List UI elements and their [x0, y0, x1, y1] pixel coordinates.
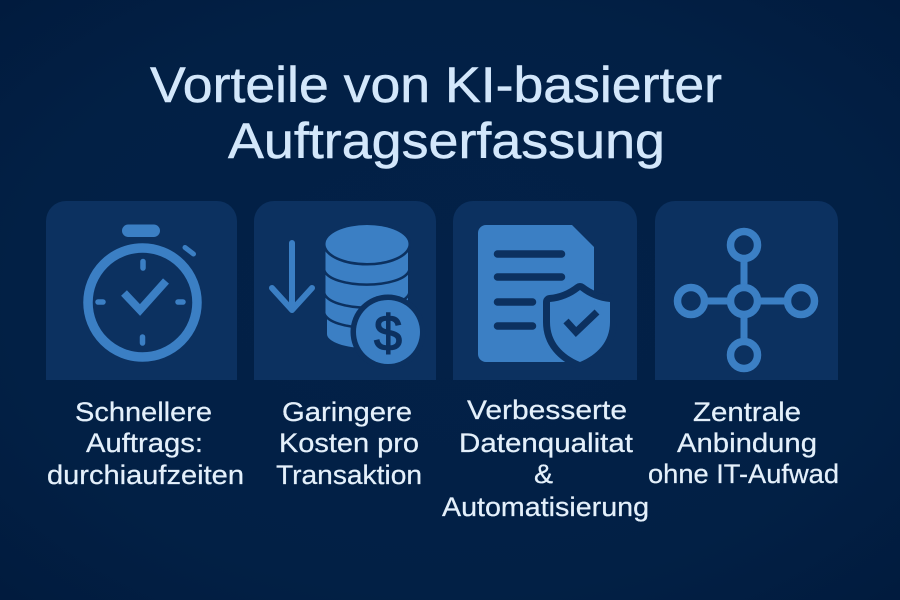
icon: coin stack with dollar	[326, 225, 426, 370]
card background 2	[254, 201, 436, 380]
label 1	[47, 397, 244, 490]
icon: document	[478, 225, 594, 362]
icon: hub network	[678, 232, 814, 368]
label 1: Auftrags:	[86, 428, 203, 458]
label 2	[276, 397, 422, 490]
icon: coin stack with dollar: $	[374, 305, 402, 361]
label 2: Transaktion	[276, 460, 422, 490]
icon: down arrow	[272, 243, 312, 310]
icon: stopwatch with check mark	[88, 224, 197, 357]
icon: shield with check	[550, 290, 610, 362]
title	[150, 57, 722, 169]
label 1: Schnellere	[75, 397, 212, 427]
label 2: Garingere	[282, 397, 412, 427]
label 4: Zentrale	[693, 397, 801, 427]
label 1: durchiaufzeiten	[47, 460, 244, 490]
panel: schnellere Auftragsdurchlaufzeiten	[46, 201, 244, 490]
label 3: &	[534, 459, 553, 489]
card background 3	[453, 201, 637, 380]
label 3: Verbesserte	[467, 395, 627, 425]
label 3	[442, 395, 649, 522]
card background 1	[46, 201, 237, 380]
label 3: Datenqualitat	[459, 428, 634, 458]
label 3: Automatisierung	[442, 492, 649, 522]
panel: zentrale Anbindung	[648, 201, 839, 489]
panel: geringere Kosten	[254, 201, 436, 490]
card background 4	[655, 201, 838, 380]
panel: Datenqualitaet und Automatisierung	[442, 201, 649, 522]
label 4	[648, 397, 839, 489]
label 4: Anbindung	[677, 428, 817, 458]
title: Vorteile von KI-basierter	[150, 57, 722, 113]
label 4: ohne IT-Aufwad	[648, 459, 839, 489]
label 2: Kosten pro	[279, 428, 419, 458]
title: Auftragserfassung	[228, 113, 665, 169]
